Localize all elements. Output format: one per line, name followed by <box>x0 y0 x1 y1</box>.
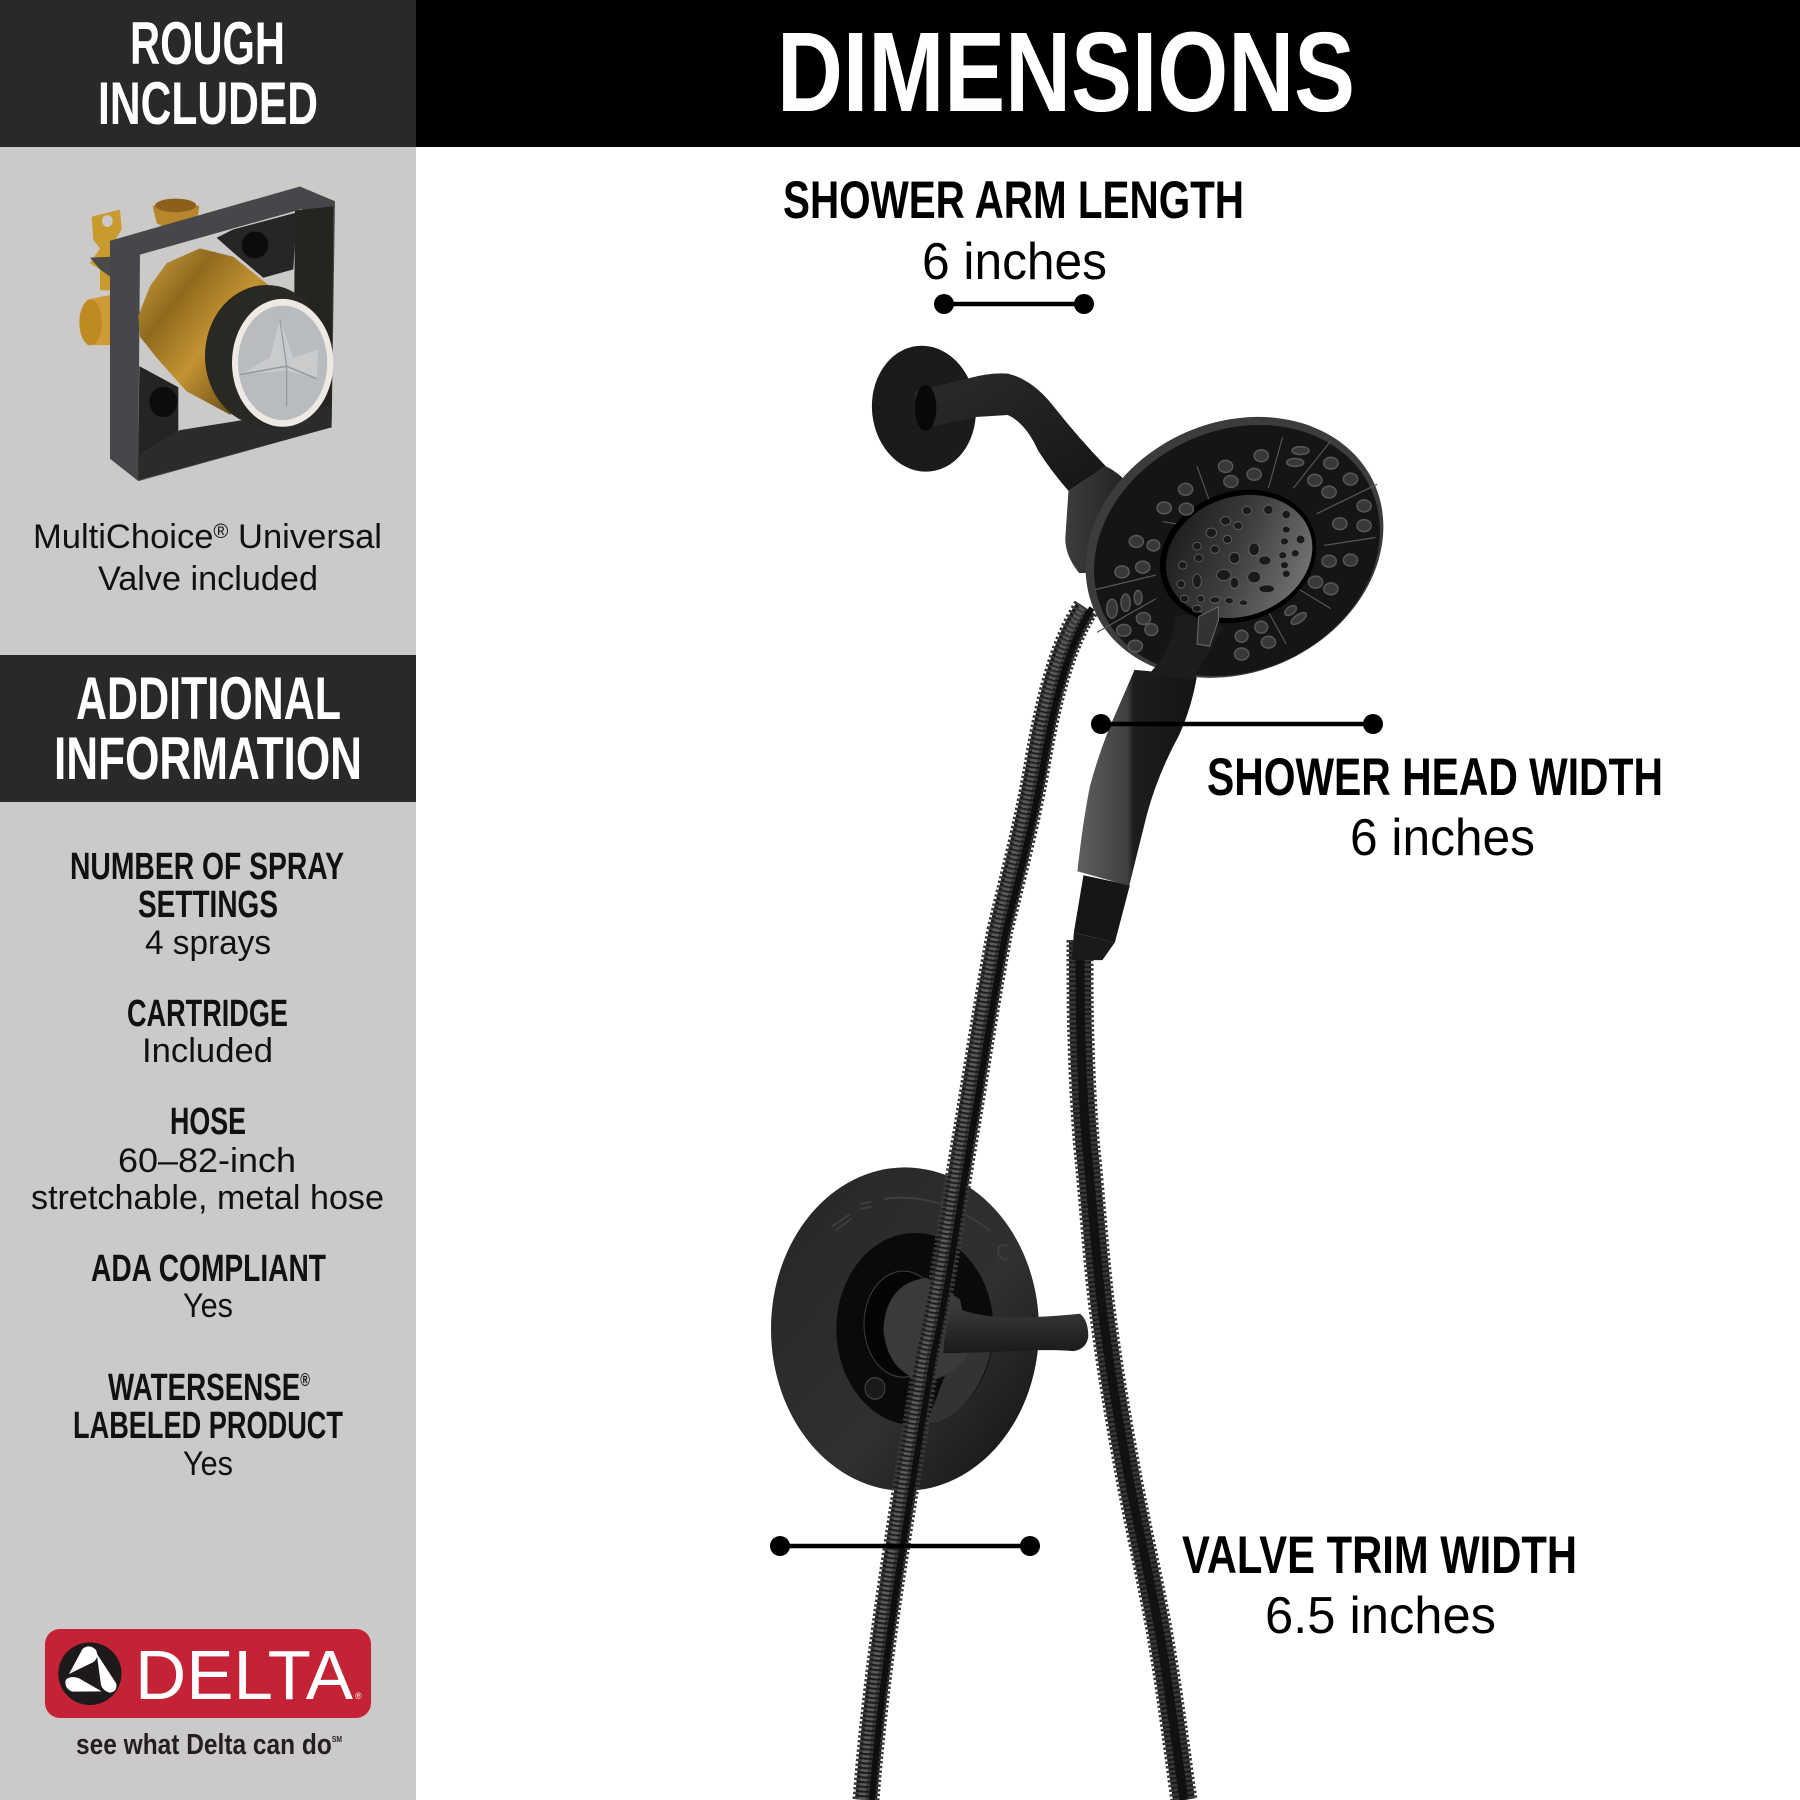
spec: ADA compliant: ADA COMPLIANT <box>91 1248 326 1290</box>
shower head assembly <box>861 335 1413 960</box>
logo: delta <box>45 1629 371 1718</box>
dimension line: valve trim <box>770 1536 1040 1556</box>
title bar: dimensions <box>416 0 1800 147</box>
spec: hose: 60–82-inch <box>118 1142 296 1180</box>
spec: watersense: WATERSENSE <box>108 1367 371 1409</box>
lower bracket <box>138 366 178 457</box>
brass mounting tab <box>90 210 122 290</box>
spec: ADA compliant <box>91 1248 326 1325</box>
spec: cartridge <box>127 993 288 1070</box>
black collar <box>205 285 328 426</box>
spec: hose: stretchable, metal hose <box>31 1179 384 1217</box>
spec: cartridge: CARTRIDGE <box>127 993 288 1035</box>
face spokes <box>1095 437 1377 644</box>
gray plug <box>238 306 327 420</box>
head rim <box>1056 377 1413 717</box>
logo: delta: DELTA <box>135 1636 353 1714</box>
center spray disc <box>1147 472 1329 641</box>
heading: rough included: INCLUDED <box>98 70 318 137</box>
inner recess <box>836 1233 994 1425</box>
spec: spray settings: SETTINGS <box>138 884 278 926</box>
shower arm <box>915 373 1106 491</box>
heading: additional information: INFORMATION <box>54 725 362 792</box>
text: valve caption: ® <box>213 521 229 543</box>
heading: rough included <box>0 0 416 147</box>
wall flange <box>861 335 986 482</box>
label: valve trim width: VALVE TRIM WIDTH <box>1182 1526 1577 1585</box>
spec: hose <box>31 1101 384 1217</box>
text: valve caption: Universal <box>228 518 382 556</box>
tagline: see what Delta can do <box>76 1729 379 1761</box>
handle hub <box>883 1278 970 1382</box>
spec: hose: HOSE <box>170 1101 246 1143</box>
brass left pipe <box>83 295 115 345</box>
icon: delta emblem <box>58 1642 122 1705</box>
spec: spray settings: 4 sprays <box>145 924 271 962</box>
label: shower arm length: SHOWER ARM LENGTH <box>783 171 1244 230</box>
text: valve caption: Valve included <box>98 560 318 598</box>
spec: spray settings <box>70 846 344 962</box>
label: shower head width: SHOWER HEAD WIDTH <box>1207 748 1663 807</box>
heading: additional information <box>0 655 416 802</box>
brass top pipe <box>153 201 203 261</box>
panel: sidebar background <box>0 0 416 1800</box>
frame opening <box>138 209 302 455</box>
heading: additional information: ADDITIONAL <box>76 665 341 732</box>
spec: ADA compliant: Yes <box>183 1287 233 1325</box>
frame outer <box>110 186 335 481</box>
brass valve body <box>138 248 270 415</box>
hose: left strand <box>862 608 1092 1800</box>
handle neck <box>1074 875 1130 942</box>
hand shower handle <box>1077 670 1197 886</box>
neck to hose taper <box>1072 932 1115 960</box>
heading: rough included: ROUGH <box>130 10 285 77</box>
head face <box>1066 387 1408 714</box>
label: shower arm length: 6 inches <box>922 233 1107 291</box>
swivel mount <box>1065 466 1131 573</box>
text: valve caption: MultiChoice <box>33 518 211 556</box>
cartridge ring <box>864 1271 943 1377</box>
title: DIMENSIONS <box>777 9 1355 135</box>
label: valve trim width: 6.5 inches <box>1265 1587 1496 1645</box>
spec: watersense <box>73 1367 343 1483</box>
outer nozzles <box>1107 447 1371 660</box>
frame bottom wall <box>138 406 332 480</box>
tagline: SM <box>332 1735 342 1744</box>
upper bracket <box>217 213 297 278</box>
spray selector <box>1197 607 1218 646</box>
label: shower head width: 6 inches <box>1350 809 1535 867</box>
hose: right strand <box>1080 940 1184 1800</box>
escutcheon plate <box>771 1167 1039 1491</box>
label: valve trim width <box>1182 1526 1577 1645</box>
center nozzles <box>1177 505 1305 612</box>
dimension line: shower arm <box>934 294 1094 314</box>
screw <box>865 1378 885 1399</box>
spec: watersense: ® <box>300 1370 310 1390</box>
spec: spray settings: NUMBER OF SPRAY <box>70 846 344 888</box>
logo: delta: ® <box>355 1691 362 1701</box>
icon: rough-in valve <box>79 186 335 481</box>
plate markings <box>832 1198 1008 1260</box>
label: shower head width <box>1207 748 1663 867</box>
lever handle <box>943 1303 1088 1353</box>
label: shower arm length <box>783 171 1244 291</box>
spec: cartridge: Included <box>142 1032 273 1070</box>
chrome ring <box>232 299 333 427</box>
valve trim <box>771 1167 1088 1491</box>
handle grip over face <box>1147 613 1222 680</box>
spec: watersense: Yes <box>183 1445 233 1483</box>
frame right wall <box>293 206 333 425</box>
dimension line: shower head <box>1091 714 1383 734</box>
spec: watersense: LABELED PRODUCT <box>73 1405 343 1447</box>
text: valve caption <box>33 518 382 598</box>
gray tab bracket <box>90 257 112 278</box>
